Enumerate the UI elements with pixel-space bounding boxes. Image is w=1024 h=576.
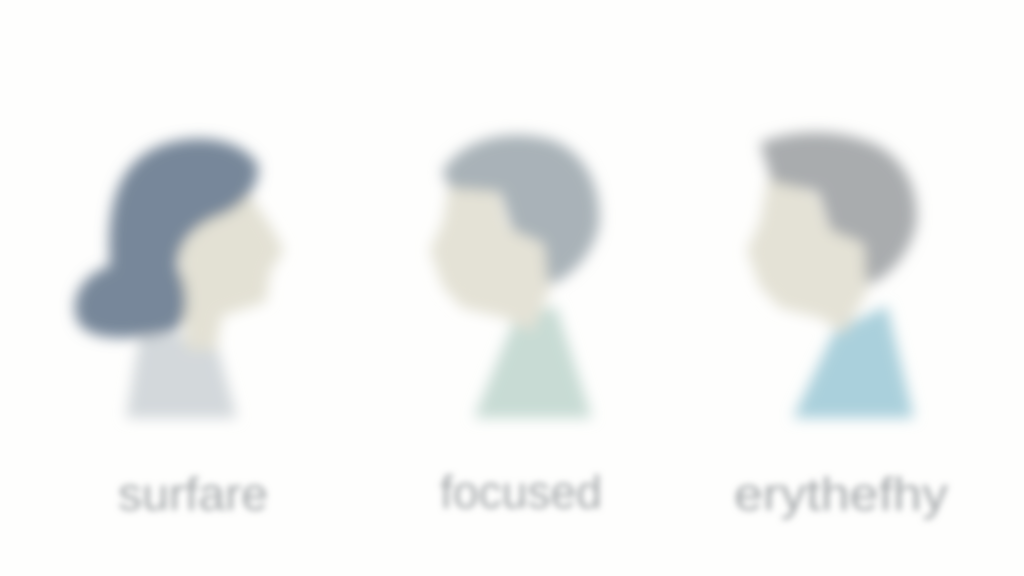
portrait: empathy figure <box>747 132 917 418</box>
hair <box>442 135 599 285</box>
body <box>793 306 914 418</box>
hair <box>760 132 917 285</box>
hair <box>75 139 258 338</box>
portrait: surface figure <box>75 139 284 418</box>
body <box>126 335 237 418</box>
label: focused: focused <box>440 466 602 518</box>
portrait: focused figure <box>430 135 599 418</box>
label: empathy: erythefhy <box>734 468 948 520</box>
body <box>474 306 592 418</box>
face <box>430 178 550 332</box>
face <box>180 195 284 350</box>
face <box>747 178 868 334</box>
label: surface: surfare <box>118 468 268 520</box>
